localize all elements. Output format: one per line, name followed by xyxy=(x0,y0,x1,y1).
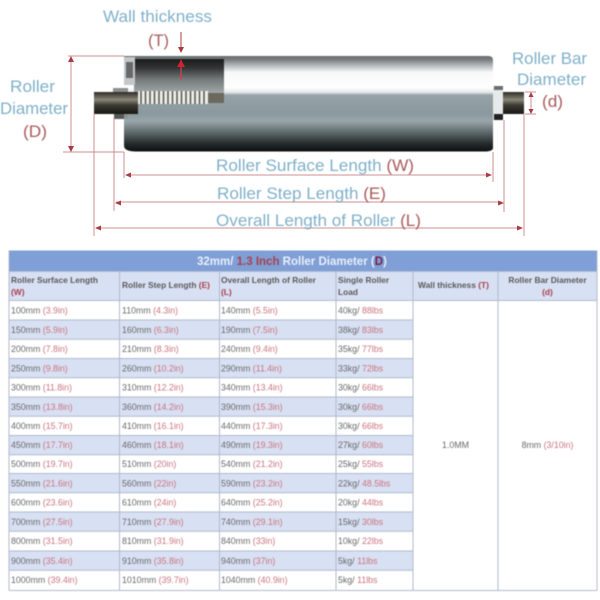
roller body xyxy=(124,56,493,152)
table rows: 10kg/ 22lbs xyxy=(338,536,384,546)
zebra row stripes xyxy=(9,320,413,570)
table rows: 27kg/ 60lbs xyxy=(338,440,384,450)
table title bar xyxy=(9,250,597,272)
label: overall length: Overall Length of Roller (L) xyxy=(216,212,421,230)
label: wall thickness: Wall thickness xyxy=(103,8,212,26)
label: roller bar diameter: Roller Bar xyxy=(512,50,588,68)
table rows: 5kg/ 11lbs xyxy=(338,556,378,566)
header row: (W) xyxy=(11,287,25,297)
dimension lines xyxy=(63,32,536,236)
label: roller bar diameter: Diameter xyxy=(517,71,587,89)
table rows: 1010mm (39.7in) xyxy=(122,575,189,585)
table rows xyxy=(11,306,391,585)
label: roller diameter: (D) xyxy=(23,123,47,141)
header row xyxy=(9,272,597,300)
header row: (L) xyxy=(221,287,232,297)
table rows: 500mm (19.7in) xyxy=(11,459,73,469)
table rows: 710mm (27.9in) xyxy=(122,517,184,527)
left end cap inner xyxy=(126,62,133,78)
table rows: 560mm (22in) xyxy=(122,478,176,488)
spec table xyxy=(9,250,597,590)
inner shaft xyxy=(138,93,224,103)
label: roller diameter: Roller xyxy=(10,78,56,96)
table rows: 450mm (17.7in) xyxy=(11,440,73,450)
table rows: 300mm (11.8in) xyxy=(11,382,72,392)
table rows: 40kg/ 88lbs xyxy=(338,306,384,316)
cutaway interior xyxy=(134,59,224,93)
table rows: 260mm (10.2in) xyxy=(122,364,184,374)
table rows: 290mm (11.4in) xyxy=(221,364,282,374)
table rows: 1040mm (40.9in) xyxy=(221,575,288,585)
table rows: 190mm (7.5in) xyxy=(221,325,278,335)
table rows: 100mm (3.9in) xyxy=(11,306,68,316)
spring xyxy=(138,91,208,104)
label: roller diameter xyxy=(0,78,69,141)
table rows: 400mm (15.7in) xyxy=(11,421,73,431)
label: roller bar diameter xyxy=(512,50,588,111)
table grid xyxy=(9,250,597,590)
table rows: 33kg/ 72lbs xyxy=(338,364,384,374)
table rows: 600mm (23.6in) xyxy=(11,498,73,508)
table rows: 410mm (16.1in) xyxy=(122,421,184,431)
header row: Roller Step Length (E) xyxy=(122,280,210,290)
table rows: 700mm (27.5in) xyxy=(11,517,73,527)
table rows: 35kg/ 77lbs xyxy=(338,344,384,354)
label: wall thickness: (T) xyxy=(148,32,169,50)
table rows: 810mm (31.9in) xyxy=(122,536,184,546)
label: roller step length: Roller Step Length (E) xyxy=(217,185,386,203)
header row: Overall Length of Roller xyxy=(221,275,317,285)
table rows: 20kg/ 44lbs xyxy=(338,498,384,508)
table rows: 310mm (12.2in) xyxy=(122,382,184,392)
table rows: 740mm (29.1in) xyxy=(221,517,283,527)
table rows: 490mm (19.3in) xyxy=(221,440,283,450)
table rows: 940mm (37in) xyxy=(221,556,275,566)
table rows: 910mm (35.8in) xyxy=(122,556,184,566)
table rows: 160mm (6.3in) xyxy=(122,325,179,335)
right collar xyxy=(493,86,503,120)
table rows: 15kg/ 30lbs xyxy=(338,517,384,527)
label: roller bar diameter: (d) xyxy=(542,93,563,111)
table rows: 150mm (5.9in) xyxy=(11,325,68,335)
table rows: 1000mm (39.4in) xyxy=(11,575,78,585)
left end cap xyxy=(124,57,135,85)
label: roller diameter: Diameter xyxy=(0,100,69,118)
wall thickness value: 1.0MM xyxy=(442,440,469,450)
table rows: 350mm (13.8in) xyxy=(11,402,73,412)
table rows: 900mm (35.4in) xyxy=(11,556,73,566)
header row: Load xyxy=(338,287,358,297)
table rows: 5kg/ 11lbs xyxy=(338,575,378,585)
table rows: 110mm (4.3in) xyxy=(122,306,178,316)
table rows: 440mm (17.3in) xyxy=(221,421,283,431)
roller illustration xyxy=(94,56,524,152)
table rows: 30kg/ 66lbs xyxy=(338,402,384,412)
table title bar: 32mm/ 1.3 Inch Roller Diameter (D) xyxy=(197,256,387,268)
header row: Roller Bar Diameter xyxy=(508,275,587,285)
table rows: 25kg/ 55lbs xyxy=(338,459,384,469)
header row: (d) xyxy=(542,287,553,297)
table rows: 840mm (33in) xyxy=(221,536,275,546)
table rows: 640mm (25.2in) xyxy=(221,498,283,508)
table rows: 200mm (7.8in) xyxy=(11,344,68,354)
right shaft xyxy=(503,92,524,114)
table rows: 360mm (14.2in) xyxy=(122,402,184,412)
table rows: 140mm (5.5in) xyxy=(221,306,278,316)
table rows: 30kg/ 66lbs xyxy=(338,421,384,431)
table rows: 590mm (23.2in) xyxy=(221,478,283,488)
table rows: 800mm (31.5in) xyxy=(11,536,73,546)
table rows: 38kg/ 83lbs xyxy=(338,325,384,335)
table rows: 250mm (9.8in) xyxy=(11,364,68,374)
table rows: 390mm (15.3in) xyxy=(221,402,283,412)
header row: Single Roller xyxy=(338,275,390,285)
table rows: 610mm (24in) xyxy=(122,498,176,508)
table rows: 540mm (21.2in) xyxy=(221,459,283,469)
table rows: 240mm (9.4in) xyxy=(221,344,278,354)
table rows: 210mm (8.3in) xyxy=(122,344,179,354)
header row: Wall thickness (T) xyxy=(418,280,489,290)
header row: Roller Surface Length xyxy=(11,275,98,285)
table rows: 340mm (13.4in) xyxy=(221,382,283,392)
lower collar xyxy=(114,114,124,119)
table rows: 550mm (21.6in) xyxy=(11,478,73,488)
table rows: 510mm (20in) xyxy=(122,459,176,469)
left collar xyxy=(113,88,128,118)
label: roller surface length: Roller Surface Length (W) xyxy=(216,157,414,175)
table rows: 22kg/ 48.5lbs xyxy=(338,478,391,488)
left shaft xyxy=(94,92,138,114)
table rows: 30kg/ 66lbs xyxy=(338,382,384,392)
roller bar diameter value: 8mm (3/10in) xyxy=(522,440,573,450)
label: wall thickness xyxy=(103,8,212,50)
table rows: 460mm (18.1in) xyxy=(122,440,184,450)
